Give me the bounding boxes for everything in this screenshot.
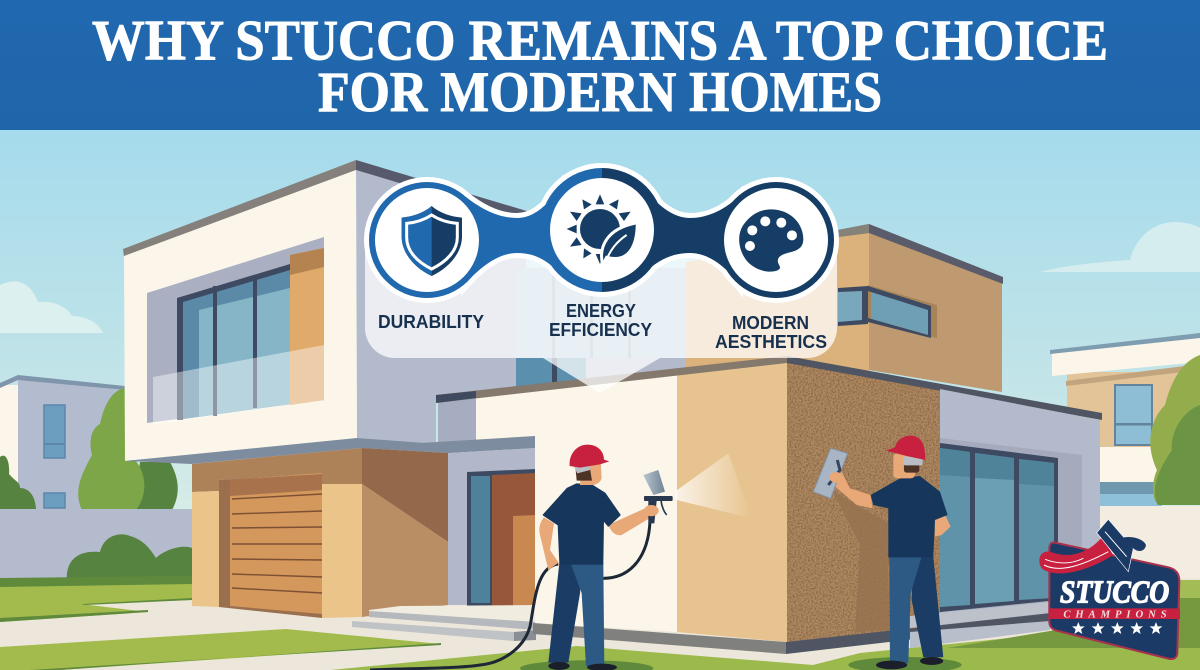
house: rear tan wall <box>686 224 1003 400</box>
shirt <box>871 476 948 557</box>
logo trowel <box>1097 519 1146 572</box>
icon wells <box>375 178 828 292</box>
icon chain outline <box>369 168 834 298</box>
ledge under upper box <box>125 437 536 464</box>
trowel shadow on wall <box>832 490 889 632</box>
right grey box <box>940 389 1100 626</box>
cloud right <box>1040 222 1200 272</box>
rear window <box>868 285 937 338</box>
head <box>893 453 915 478</box>
logo text champions: CHAMPIONS <box>1063 609 1167 620</box>
spray cone <box>675 453 752 518</box>
logo text stucco: STUCCO <box>1060 573 1169 609</box>
worker shadow <box>848 657 962 670</box>
cloud left <box>0 281 103 333</box>
garage door <box>230 473 322 614</box>
lower front: textured wall <box>787 362 940 642</box>
side window seen through panel <box>516 268 686 388</box>
title: WHY STUCCO REMAINS A TOP CHOICE <box>92 10 1108 72</box>
arms <box>830 472 873 508</box>
entry column <box>438 398 476 444</box>
garage block <box>192 448 448 618</box>
label: modern aesthetics: MODERN <box>732 312 809 333</box>
shirt <box>543 484 620 564</box>
head <box>580 461 602 485</box>
lawn right <box>947 596 1200 648</box>
bush right <box>1150 355 1200 505</box>
lawn top left <box>0 578 192 622</box>
trowel <box>813 448 848 498</box>
entry steps <box>352 605 536 641</box>
leaf <box>602 223 637 265</box>
icon: sun and leaf <box>567 194 637 265</box>
background house right <box>1050 333 1200 507</box>
label: modern aesthetics: AESTHETICS <box>715 331 827 352</box>
lower front: cream wall <box>476 374 677 632</box>
house: roof of upper box <box>356 160 530 222</box>
worker troweling <box>813 436 962 670</box>
worker spraying <box>370 445 752 670</box>
logo: stucco champions <box>1039 519 1180 659</box>
worker shadow <box>520 660 653 670</box>
entry with door <box>448 448 536 610</box>
logo stars <box>1072 622 1162 634</box>
title: FOR MODERN HOMES <box>318 61 882 124</box>
trees left <box>0 388 178 510</box>
logo badge <box>1049 542 1179 659</box>
legs <box>548 563 582 663</box>
base course <box>533 602 1060 654</box>
lower roof <box>436 356 1102 420</box>
icon: shield <box>402 206 462 276</box>
icon chain blue half <box>369 168 602 298</box>
label: energy efficiency: EFFICIENCY <box>549 319 653 340</box>
spray gun <box>643 470 673 523</box>
panel background <box>365 240 837 393</box>
icon: palette <box>739 209 803 272</box>
helmet <box>886 436 925 460</box>
background house left <box>0 375 125 510</box>
bush <box>67 534 192 582</box>
helmet <box>570 445 609 468</box>
icon chain navy half <box>602 168 834 298</box>
hose <box>370 522 650 670</box>
lawn front left <box>0 629 441 670</box>
logo swoosh <box>1039 537 1113 573</box>
arms <box>539 517 559 570</box>
house: upper box front <box>124 170 357 461</box>
lower front: sand wall <box>677 362 787 642</box>
balcony window <box>147 237 324 425</box>
lawn front <box>331 633 1200 670</box>
label: energy efficiency: ENERGY <box>566 300 637 321</box>
logo band <box>1049 608 1180 619</box>
garden wall left <box>0 509 192 581</box>
wall right <box>1100 506 1200 582</box>
ground and driveway <box>0 576 1200 670</box>
house: upper box side wall <box>356 170 526 446</box>
info panel <box>365 168 837 393</box>
label: durability: DURABILITY <box>378 311 485 332</box>
sky background <box>0 130 1200 590</box>
legs <box>912 557 943 657</box>
header band with title <box>0 0 1200 130</box>
